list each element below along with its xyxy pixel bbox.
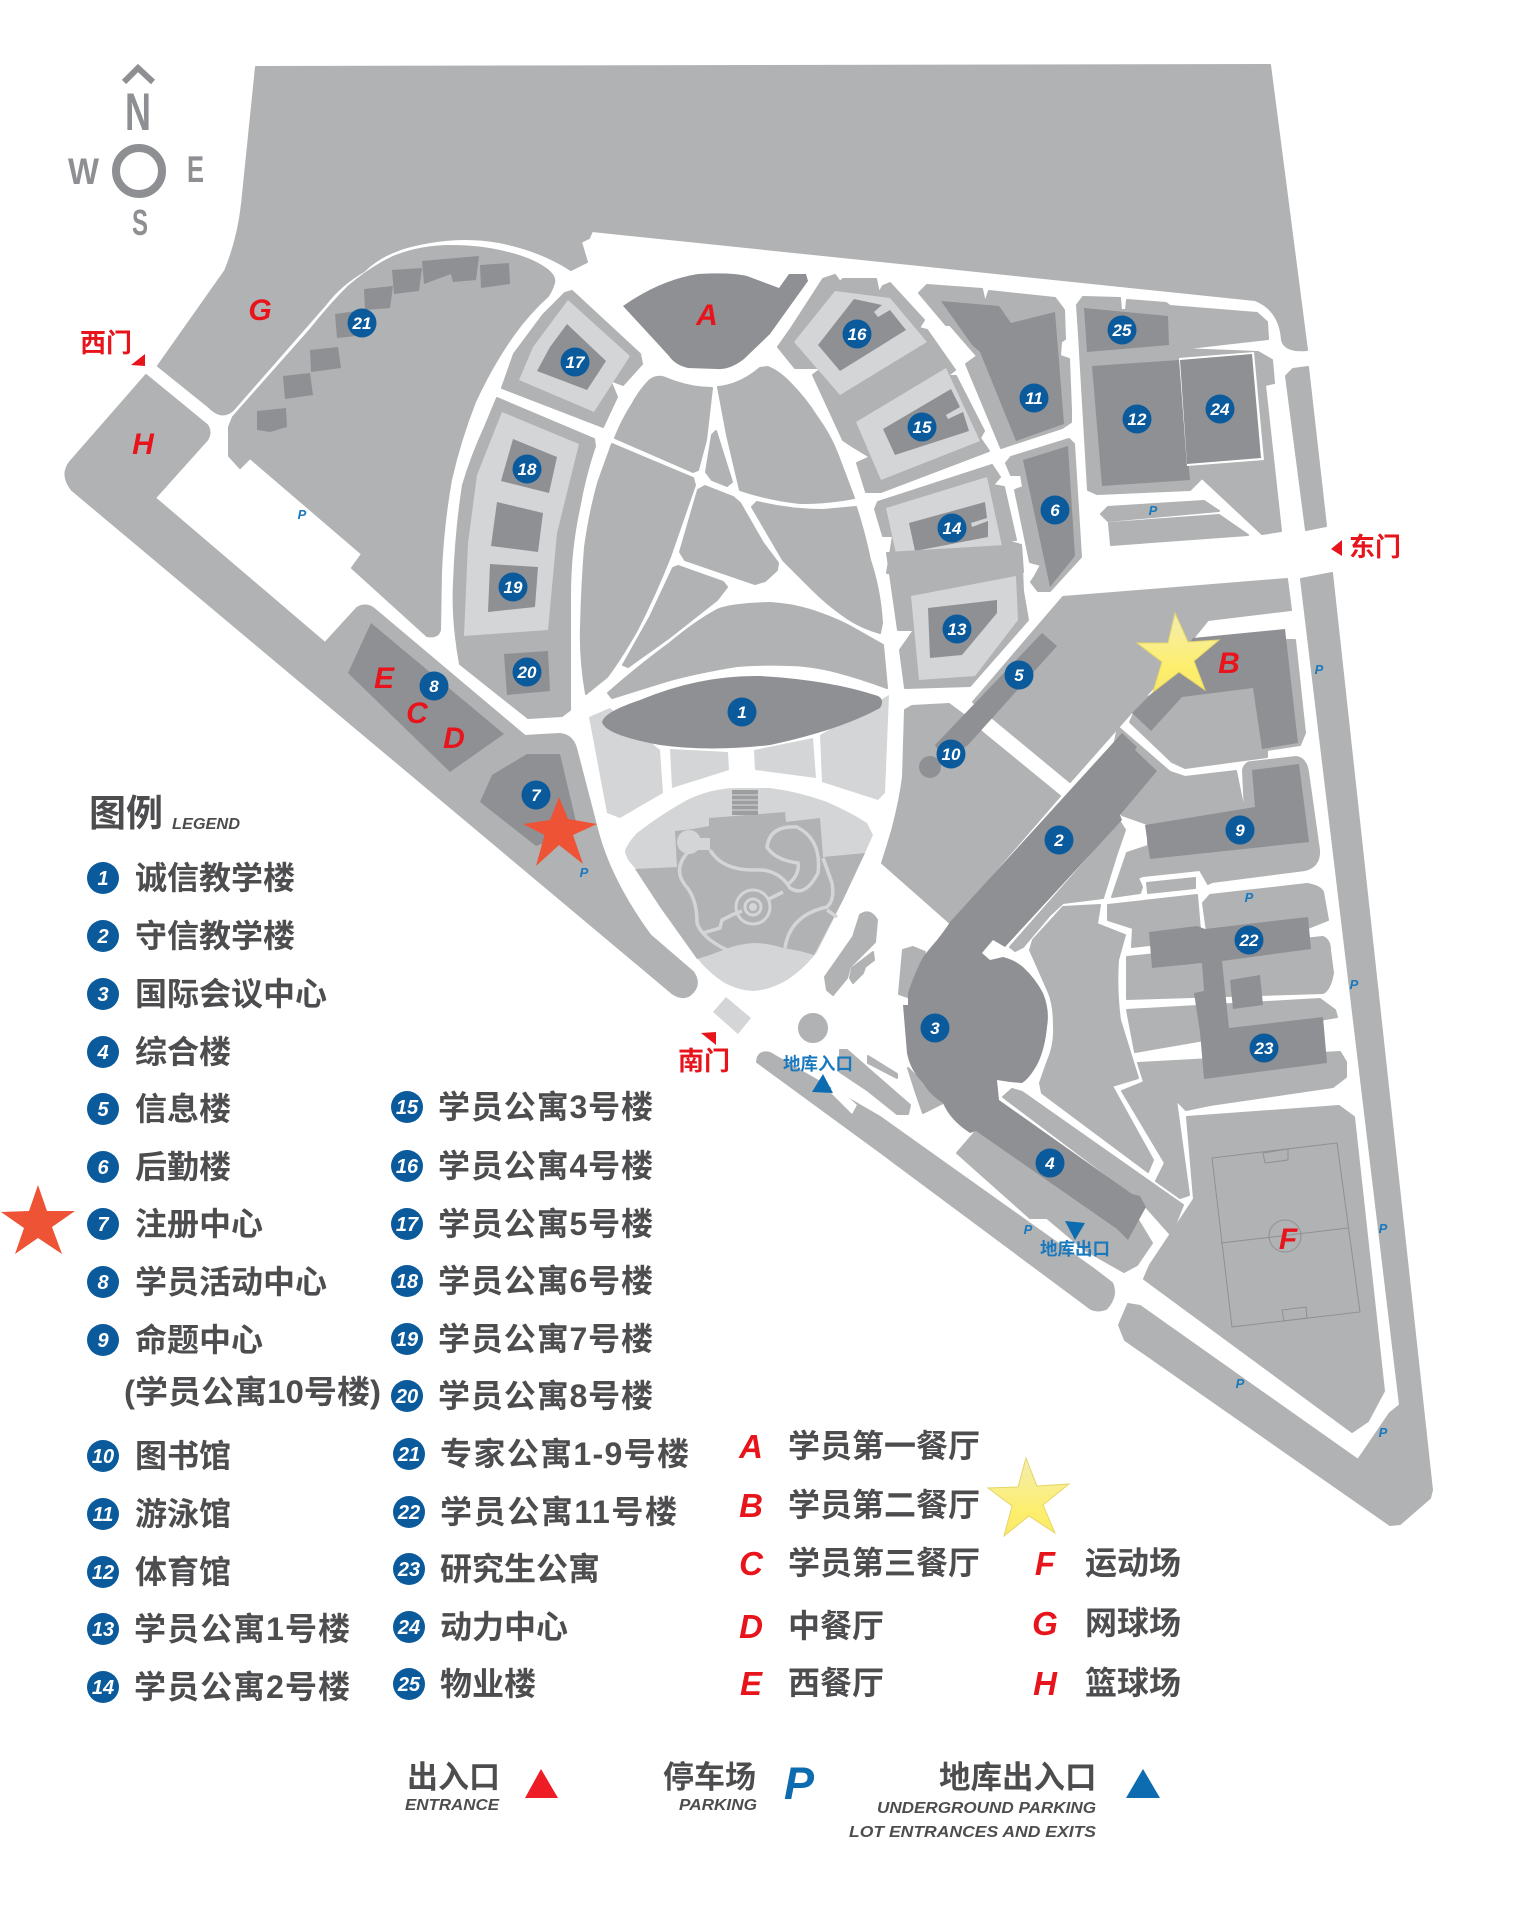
legend heading	[89, 793, 240, 834]
legend column 1: 11	[93, 1504, 113, 1526]
sports field	[1144, 1106, 1384, 1432]
legend column 2: 学员公寓4号楼	[438, 1148, 653, 1184]
gate: south: 南门	[678, 1046, 730, 1076]
map number markers: 8	[429, 677, 439, 696]
ground: block below B	[1105, 727, 1245, 825]
legend column 1: 6	[97, 1157, 109, 1179]
map number markers: 23	[1254, 1039, 1274, 1058]
legend column 2: 学员公寓11号楼	[440, 1494, 677, 1530]
legend column 3 dining: 学员第三餐厅	[788, 1545, 980, 1581]
map venue letters	[132, 294, 1298, 1256]
map number markers: 1	[737, 703, 747, 722]
gate: east: 东门	[1349, 532, 1401, 562]
lawn west of dormitories	[1030, 905, 1153, 1172]
dormitory buildings 22 and 23	[1149, 917, 1327, 1079]
map number markers	[348, 308, 1278, 1178]
legend column 1: 14	[92, 1677, 114, 1699]
legend column 4 sports	[1032, 1545, 1181, 1702]
legend column 3 dining: A	[738, 1428, 763, 1465]
legend column 1: 体育馆	[135, 1554, 231, 1590]
map number markers: 6	[1050, 501, 1060, 520]
underground exit	[1040, 1221, 1110, 1259]
legend column 2: 学员公寓7号楼	[438, 1321, 653, 1357]
star: legend dining hall B	[988, 1458, 1069, 1536]
map venue letters: G	[248, 294, 272, 327]
block 11	[919, 285, 1071, 448]
central lawns	[581, 367, 887, 698]
legend column 3 dining: 学员第一餐厅	[788, 1428, 980, 1464]
map number markers: 9	[1235, 821, 1245, 840]
parking markers: P	[1379, 1425, 1388, 1440]
map number markers: 14	[943, 519, 962, 538]
legend column 1	[87, 860, 381, 1705]
legend column 1: 13	[92, 1619, 114, 1641]
legend column 2: 物业楼	[440, 1666, 536, 1702]
legend column 3 dining: C	[739, 1545, 764, 1582]
legend column 1: 游泳馆	[135, 1496, 231, 1532]
campus map	[65, 65, 1432, 1525]
star: dining hall B	[1137, 613, 1219, 692]
map number markers: 16	[848, 325, 867, 344]
underground entrance	[783, 1054, 853, 1093]
legend column 2: 专家公寓1-9号楼	[440, 1436, 689, 1472]
legend column 2: 21	[397, 1444, 420, 1466]
key: entrance: 出入口	[407, 1760, 500, 1795]
parking markers: P	[1245, 890, 1254, 905]
map venue letters: E	[374, 662, 395, 695]
block 15	[852, 368, 989, 492]
legend column 2: 动力中心	[440, 1609, 568, 1645]
block 9	[1112, 757, 1319, 897]
south small grounds	[830, 1050, 910, 1114]
key: entrance	[405, 1760, 558, 1814]
legend column 2: 学员公寓6号楼	[438, 1263, 653, 1299]
key: underground parking	[849, 1759, 1160, 1841]
legend column 1: 学员公寓1号楼	[134, 1611, 350, 1647]
key: underground parking: 地库出入口	[939, 1759, 1097, 1795]
key: parking: 停车场	[663, 1760, 756, 1795]
compass: N	[125, 83, 151, 142]
map number markers: 11	[1025, 389, 1043, 408]
map number markers: 21	[352, 314, 371, 333]
parking markers: P	[1350, 977, 1359, 992]
parking markers: P	[298, 507, 307, 522]
legend column 1: 8	[97, 1272, 109, 1294]
legend column 1: 守信教学楼	[135, 918, 295, 954]
plaza pieces	[589, 695, 889, 818]
building 5 and 10	[919, 633, 1057, 778]
map number markers: 13	[948, 620, 967, 639]
ground: block 5	[973, 579, 1291, 782]
compass: S	[132, 202, 148, 243]
legend column 4 sports: 篮球场	[1085, 1665, 1181, 1701]
map number markers: 10	[942, 745, 961, 764]
gate: west: 西门	[80, 328, 132, 358]
underground exit: 地库出口	[1040, 1239, 1110, 1259]
legend column 1: 10	[92, 1446, 114, 1468]
legend heading: LEGEND	[172, 816, 240, 833]
dormitory rows	[1108, 884, 1346, 1198]
ground: west villas	[229, 246, 554, 636]
parking markers: P	[1379, 1221, 1388, 1236]
block 18 to 20	[454, 398, 595, 718]
block 16	[778, 275, 955, 446]
legend column 1: 综合楼	[135, 1034, 231, 1070]
map number markers: 7	[531, 786, 542, 805]
gate: south	[678, 1032, 730, 1076]
legend column 1: 4	[96, 1042, 109, 1064]
legend column 2: 25	[397, 1674, 421, 1696]
compass	[68, 68, 204, 243]
legend column 2: 22	[397, 1502, 420, 1524]
legend column 4 sports: F	[1035, 1545, 1056, 1582]
legend heading: 图例	[89, 793, 163, 834]
map number markers: 18	[518, 460, 537, 479]
legend column 2: 15	[396, 1097, 419, 1119]
legend column 1: 信息楼	[135, 1091, 231, 1127]
legend column 1: 1	[97, 868, 109, 890]
building: dining hall A	[623, 273, 808, 369]
map number markers: 25	[1112, 321, 1132, 340]
parking markers: P	[1315, 662, 1324, 677]
building: teaching block 1	[602, 676, 882, 748]
map venue letters: C	[406, 697, 429, 730]
building: restaurants and activity centre	[348, 623, 504, 772]
legend column 1: 国际会议中心	[135, 976, 327, 1012]
map venue letters: B	[1218, 647, 1240, 680]
map venue letters: H	[132, 428, 155, 461]
map number markers: 4	[1044, 1154, 1055, 1173]
map number markers: 17	[566, 353, 586, 372]
legend column 1: 7	[97, 1214, 109, 1236]
stars on map	[523, 613, 1219, 866]
south gate pieces	[713, 912, 877, 1042]
villa buildings	[257, 256, 510, 432]
legend column 2: 17	[396, 1214, 419, 1236]
key: parking	[663, 1758, 815, 1814]
legend column 2: 20	[395, 1386, 418, 1408]
key: underground parking: UNDERGROUND PARKING	[877, 1800, 1096, 1817]
legend column 3 dining: B	[739, 1487, 763, 1524]
dining hall B	[1130, 629, 1305, 768]
legend column 4 sports: 网球场	[1085, 1605, 1181, 1641]
map number markers: 15	[913, 418, 932, 437]
ground: southwest strip	[65, 375, 697, 997]
block 14	[875, 465, 1023, 573]
legend column 1: 注册中心	[135, 1206, 263, 1242]
compass: E	[187, 149, 204, 190]
map venue letters: A	[695, 299, 718, 332]
legend column 2: 学员公寓8号楼	[438, 1378, 653, 1414]
gate: west	[80, 328, 145, 366]
legend column 2	[391, 1089, 689, 1702]
map number markers: 19	[504, 578, 523, 597]
lawn below building 2	[1010, 822, 1125, 951]
parking markers: P	[1024, 1222, 1033, 1237]
map venue letters: D	[443, 722, 465, 755]
legend column 2: 23	[397, 1559, 420, 1581]
legend column 2: 18	[396, 1271, 419, 1293]
northeast strip	[1286, 367, 1326, 530]
legend column 4 sports: G	[1032, 1605, 1058, 1642]
map number markers: 20	[517, 663, 537, 682]
underground entrance: 地库入口	[783, 1054, 853, 1074]
map number markers: 22	[1239, 931, 1259, 950]
legend column 3 dining: 中餐厅	[788, 1608, 884, 1644]
building: registration centre	[480, 754, 578, 846]
legend column 1: 诚信教学楼	[135, 860, 295, 896]
legend column 1: 2	[96, 926, 109, 948]
star: registration	[523, 797, 597, 866]
map number markers: 2	[1053, 831, 1064, 850]
legend column 2: 学员公寓5号楼	[438, 1206, 653, 1242]
legend column 2: 24	[397, 1617, 420, 1639]
legend column 1: 后勤楼	[135, 1149, 231, 1185]
block 13	[887, 545, 1028, 688]
compass: W	[68, 151, 99, 192]
key: parking: P	[784, 1758, 815, 1809]
legend column 1: 12	[92, 1562, 114, 1584]
legend column 3 dining	[738, 1428, 980, 1702]
legend column 1: 学员公寓2号楼	[134, 1669, 350, 1705]
map venue letters: F	[1279, 1223, 1298, 1256]
star: legend registration	[1, 1185, 75, 1254]
legend column 2: 19	[396, 1329, 419, 1351]
legend column 2: 学员公寓3号楼	[438, 1089, 653, 1125]
ground: block 10	[882, 704, 1060, 923]
parking markers: P	[580, 865, 589, 880]
legend column 2: 16	[396, 1156, 419, 1178]
block 12 24 25	[1077, 297, 1281, 545]
parking markers	[298, 503, 1388, 1440]
key: parking: PARKING	[679, 1797, 757, 1814]
legend column 1: 9	[97, 1330, 109, 1352]
legend column 1: (学员公寓10号楼)	[124, 1374, 381, 1410]
block 6	[1006, 439, 1081, 591]
legend column 3 dining: E	[740, 1665, 763, 1702]
central garden	[625, 788, 873, 991]
legend column 4 sports: 运动场	[1085, 1545, 1181, 1581]
underground parking strip	[757, 1052, 1114, 1310]
legend column 1: 学员活动中心	[135, 1264, 327, 1300]
east and south perimeter strip	[1119, 573, 1432, 1525]
legend column 1: 命题中心	[135, 1322, 263, 1358]
map number markers: 5	[1014, 666, 1024, 685]
legend column 1: 3	[97, 984, 109, 1006]
key: entrance: ENTRANCE	[405, 1797, 500, 1814]
legend column 2: 研究生公寓	[440, 1551, 600, 1587]
legend column 4 sports: H	[1033, 1665, 1058, 1702]
legend column 3 dining: 学员第二餐厅	[788, 1487, 980, 1523]
map number markers: 12	[1128, 410, 1147, 429]
key: underground parking: LOT ENTRANCES AND EXITS	[849, 1824, 1096, 1841]
legend column 1: 图书馆	[135, 1438, 231, 1474]
legend column 3 dining: D	[739, 1608, 763, 1645]
map number markers: 24	[1210, 400, 1230, 419]
buildings 2, 3 and 4	[899, 733, 1183, 1272]
legend column 1: 5	[97, 1099, 109, 1121]
block 17	[502, 291, 642, 427]
parking markers: P	[1149, 503, 1158, 518]
legend column 3 dining: 西餐厅	[788, 1665, 884, 1701]
ground: north and tennis area	[158, 65, 1307, 414]
map number markers: 3	[930, 1019, 940, 1038]
parking markers: P	[1236, 1376, 1245, 1391]
